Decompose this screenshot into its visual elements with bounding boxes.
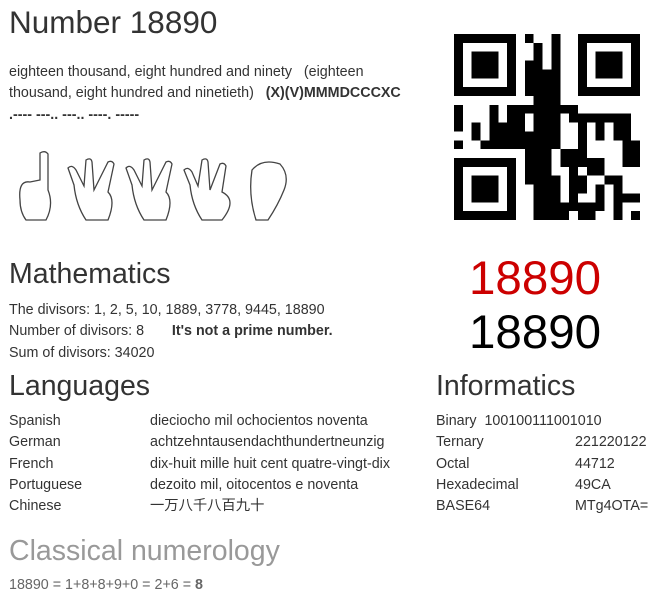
languages table: Spanish [9, 413, 61, 429]
big number black: 18890 [469, 306, 601, 359]
informatics table: Octal [436, 456, 469, 472]
languages table: Portuguese [9, 477, 82, 493]
languages table: achtzehntausendachthundertneunzig [150, 434, 384, 450]
math facts: The divisors: 1, 2, 5, 10, 1889, 3778, 9445, 18890 [9, 302, 325, 318]
QR code [454, 34, 640, 220]
languages table [9, 413, 390, 514]
big number red: 18890 [469, 252, 601, 305]
languages table: dieciocho mil ochocientos noventa [150, 413, 368, 429]
heading: Informatics: Informatics [436, 370, 575, 402]
languages table: German [9, 434, 61, 450]
informatics table: Binary 100100111001010 [436, 413, 602, 429]
informatics table: BASE64 [436, 498, 490, 514]
morse code: .---- ---.. ---.. ----. ----- [9, 107, 139, 123]
languages table: 一万八千八百九十 [150, 498, 264, 514]
languages table: dezoito mil, oitocentos e noventa [150, 477, 358, 493]
informatics table: Ternary [436, 434, 484, 450]
informatics table: 49CA [575, 477, 611, 493]
icon: sign language hands [19, 151, 287, 221]
math facts [9, 302, 333, 361]
title: Number 18890 [9, 4, 217, 40]
heading: Classical numerology: Classical numerology [9, 535, 280, 567]
heading: Mathematics: Mathematics [9, 258, 171, 290]
informatics table: 221220122 [575, 434, 647, 450]
informatics table: 44712 [575, 456, 615, 472]
languages table: dix-huit mille huit cent quatre-vingt-dix [150, 456, 390, 472]
languages table: Chinese [9, 498, 61, 514]
heading: Languages: Languages [9, 370, 150, 402]
languages table: French [9, 456, 54, 472]
math facts: Number of divisors: 8 It's not a prime number. [9, 323, 333, 339]
math facts: Sum of divisors: 34020 [9, 345, 154, 361]
informatics table [436, 413, 648, 514]
informatics table: Hexadecimal [436, 477, 519, 493]
text: number in words: eighteen thousand, eight hundred and ninety (eighteen thousand, eight hundred and ninetieth) (X)(V)MMMDCCCXC [9, 64, 401, 101]
numerology sum: 18890 = 1+8+8+9+0 = 2+6 = 8 [9, 577, 203, 593]
informatics table: MTg4OTA= [575, 498, 648, 514]
